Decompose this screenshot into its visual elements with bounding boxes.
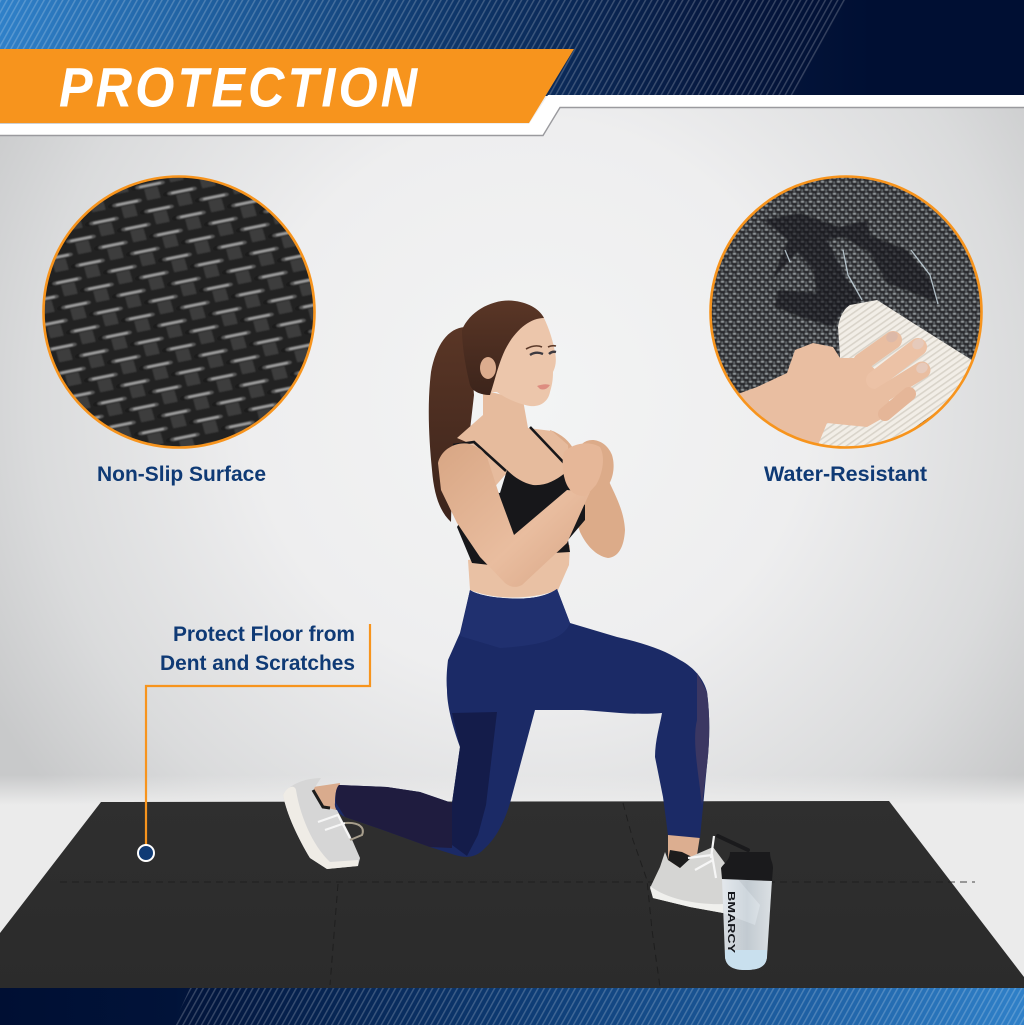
ear (480, 357, 496, 379)
face (483, 316, 556, 406)
bra straps (453, 427, 566, 471)
bottle body (722, 878, 772, 970)
header band (0, 0, 1024, 96)
shaker bottle (718, 836, 773, 970)
fist (563, 443, 603, 496)
bottle logo: BMARCY (725, 891, 736, 953)
front leg ankle skin (668, 832, 700, 868)
lips (537, 384, 550, 390)
front shoe (650, 836, 760, 925)
bottle lid (721, 852, 773, 881)
towel (815, 300, 975, 450)
floor mat (0, 801, 1024, 988)
lid flap (718, 836, 748, 850)
callout: protect floor (138, 623, 370, 861)
water glints (785, 250, 938, 304)
callout: protect floor: Dent and Scratches (160, 652, 355, 675)
hand (740, 331, 930, 444)
knee mesh panel (695, 673, 709, 805)
ponytail (429, 327, 474, 522)
callout: protect floor: Protect Floor from (173, 623, 355, 646)
leggings (335, 589, 709, 857)
title banner (0, 49, 574, 123)
water patches (763, 213, 938, 327)
brows (526, 346, 556, 349)
label: non-slip surface: Non-Slip Surface (97, 463, 266, 486)
back shoe (283, 778, 363, 869)
hair (462, 301, 544, 395)
far arm (550, 430, 625, 558)
title: PROTECTION (59, 57, 419, 119)
circle: water-resistant close-up (705, 172, 987, 454)
near arm (438, 443, 590, 587)
rear leg shadow (452, 712, 497, 856)
water (725, 950, 767, 970)
label: water-resistant: Water-Resistant (764, 463, 927, 486)
shin mesh panel (336, 785, 452, 848)
footer band (0, 988, 1024, 1025)
bra (457, 470, 585, 565)
woman in lunge pose (283, 301, 760, 925)
eyes (530, 352, 556, 355)
torso and neck (457, 390, 570, 490)
white ribbon under header (0, 95, 1024, 136)
far hand (582, 440, 614, 488)
circle: non-slip surface close-up (42, 175, 316, 449)
back leg ankle skin (313, 783, 340, 810)
midriff (468, 545, 570, 598)
leggings waistband (460, 589, 570, 648)
